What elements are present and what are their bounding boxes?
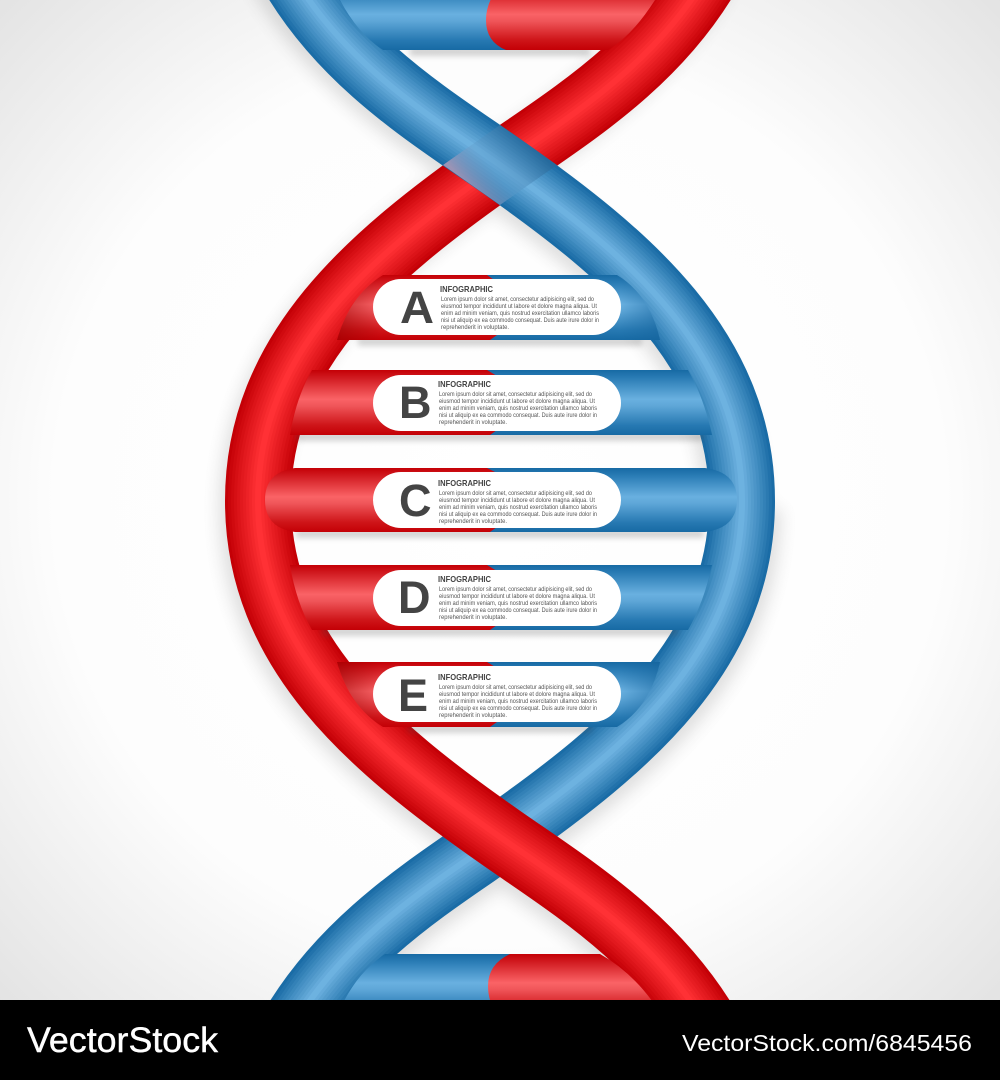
label D: enim ad minim veniam, quis nostrud exercitation ullamco laboris <box>439 600 598 607</box>
label B: eiusmod tempor incididunt ut labore et dolore magna aliqua. Ut <box>439 398 595 405</box>
label D: Lorem ipsum dolor sit amet, consectetur adipisicing elit, sed do <box>439 586 592 593</box>
bottom rung <box>344 954 652 1000</box>
DNA double helix <box>250 0 750 1045</box>
label C: eiusmod tempor incididunt ut labore et dolore magna aliqua. Ut <box>439 497 595 504</box>
label C: reprehenderit in voluptate. <box>439 518 507 525</box>
label A: enim ad minim veniam, quis nostrud exercitation ullamco laboris <box>441 310 600 317</box>
label E: eiusmod tempor incididunt ut labore et dolore magna aliqua. Ut <box>439 691 595 698</box>
label E: nisi ut aliquip ex ea commodo consequat. Duis aute irure dolor in <box>439 705 597 712</box>
label D <box>373 570 621 626</box>
label A: reprehenderit in voluptate. <box>441 324 509 331</box>
label E: enim ad minim veniam, quis nostrud exercitation ullamco laboris <box>439 698 598 705</box>
blue strand upper half <box>287 0 742 501</box>
rung C <box>265 468 737 532</box>
rung shadows <box>296 47 704 733</box>
rung D <box>290 565 712 630</box>
label A: Lorem ipsum dolor sit amet, consectetur adipisicing elit, sed do <box>441 296 594 303</box>
label B: reprehenderit in voluptate. <box>439 419 507 426</box>
label B: enim ad minim veniam, quis nostrud exercitation ullamco laboris <box>439 405 598 412</box>
label D: eiusmod tempor incididunt ut labore et dolore magna aliqua. Ut <box>439 593 595 600</box>
label C: Lorem ipsum dolor sit amet, consectetur adipisicing elit, sed do <box>439 490 592 497</box>
label D: INFOGRAPHIC <box>438 574 491 584</box>
label B: B <box>399 377 432 428</box>
label D: D <box>398 572 430 623</box>
strand shadows <box>250 0 750 1045</box>
label E: INFOGRAPHIC <box>438 672 491 682</box>
label C: C <box>399 475 432 526</box>
label E: E <box>398 670 428 721</box>
label C <box>373 472 621 528</box>
label B <box>373 375 621 431</box>
label B: nisi ut aliquip ex ea commodo consequat. Duis aute irure dolor in <box>439 412 597 419</box>
top rung <box>330 0 660 50</box>
red strand <box>258 0 713 1037</box>
label A: nisi ut aliquip ex ea commodo consequat. Duis aute irure dolor in <box>441 317 599 324</box>
label A: A <box>400 282 434 333</box>
label C: INFOGRAPHIC <box>438 478 491 488</box>
footer bar <box>0 1000 1000 1080</box>
label E: reprehenderit in voluptate. <box>439 712 507 719</box>
label E <box>373 666 621 722</box>
label D: nisi ut aliquip ex ea commodo consequat. Duis aute irure dolor in <box>439 607 597 614</box>
rung E <box>337 662 660 727</box>
blue strand lower half <box>287 501 742 1037</box>
label A <box>373 279 621 335</box>
rung A <box>337 275 660 340</box>
label E: Lorem ipsum dolor sit amet, consectetur adipisicing elit, sed do <box>439 684 592 691</box>
footer bar: VectorStock <box>27 1021 219 1060</box>
footer bar: VectorStock.com/6845456 <box>682 1030 972 1056</box>
label B: Lorem ipsum dolor sit amet, consectetur adipisicing elit, sed do <box>439 391 592 398</box>
label B: INFOGRAPHIC <box>438 379 491 389</box>
label D: reprehenderit in voluptate. <box>439 614 507 621</box>
translucent crossing overlay <box>443 125 557 205</box>
label C: enim ad minim veniam, quis nostrud exercitation ullamco laboris <box>439 504 598 511</box>
rung B <box>290 370 712 435</box>
label C: nisi ut aliquip ex ea commodo consequat. Duis aute irure dolor in <box>439 511 597 518</box>
label A: eiusmod tempor incididunt ut labore et dolore magna aliqua. Ut <box>441 303 597 310</box>
label A: INFOGRAPHIC <box>440 284 493 294</box>
